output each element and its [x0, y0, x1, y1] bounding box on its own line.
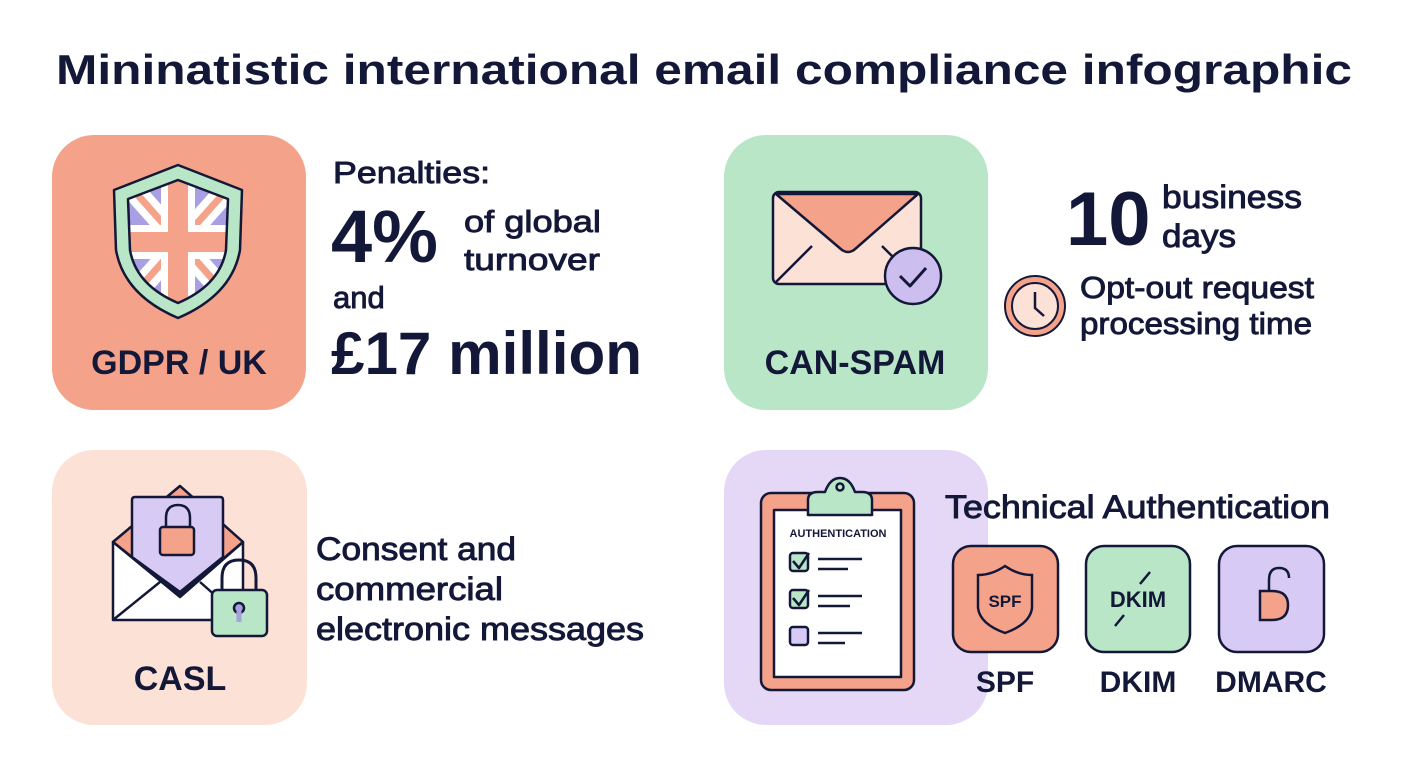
label: CASL: CASL: [134, 660, 226, 698]
badge: DKIM: DKIM: [1110, 587, 1166, 612]
label: GDPR / UK: GDPR / UK: [91, 344, 267, 382]
panel: GDPR / UK: [52, 135, 306, 410]
text: opt-out: Opt-out request: [1080, 270, 1314, 305]
text block: penalties: and: [333, 280, 385, 315]
badge: SPF: SPF: [976, 666, 1034, 699]
icon: clipboard: [761, 478, 914, 690]
text: opt-out: [1080, 270, 1314, 341]
stat: 10 business days: days: [1162, 218, 1236, 254]
stat: 10 business days: [1066, 177, 1302, 262]
text block: penalties: [331, 155, 642, 387]
text block: penalties: of global: [464, 204, 601, 239]
text: consent: electronic messages: [316, 611, 644, 647]
title: Mininatistic international email compliance infographic: [56, 46, 1352, 93]
label: CAN-SPAM: CAN-SPAM: [765, 344, 945, 382]
text: consent: Consent and: [316, 531, 516, 567]
badge: DKIM: [1086, 546, 1190, 699]
text block: penalties: £17 million: [331, 320, 642, 387]
text: consent: commercial: [316, 571, 503, 607]
text: consent: [316, 531, 644, 647]
stat: 10 business days: business: [1162, 179, 1302, 215]
icon: envelope with check: [773, 192, 941, 304]
panel: CAN-SPAM: [724, 135, 988, 410]
text block: penalties: turnover: [464, 242, 600, 277]
icon: clock: [1005, 276, 1065, 336]
icon: clipboard: AUTHENTICATION: [790, 528, 887, 540]
stat: 10 business days: 10: [1066, 177, 1151, 262]
badge: SPF: SPF: [988, 592, 1022, 611]
icon: envelope with locks: [113, 486, 267, 636]
panel: CASL: [52, 450, 307, 725]
badge: SPF: [953, 546, 1058, 699]
text block: penalties: Penalties:: [333, 155, 490, 190]
panel: technical authentication: [724, 450, 988, 725]
text block: penalties: 4%: [331, 195, 438, 278]
text: opt-out: processing time: [1080, 306, 1312, 341]
badge: DMARC: [1215, 546, 1327, 699]
badge: DMARC: DMARC: [1215, 666, 1327, 699]
badge: DKIM: DKIM: [1100, 666, 1176, 699]
heading: technical authentication: Technical Authentication: [945, 489, 1330, 525]
icon: UK flag shield: [114, 165, 242, 318]
